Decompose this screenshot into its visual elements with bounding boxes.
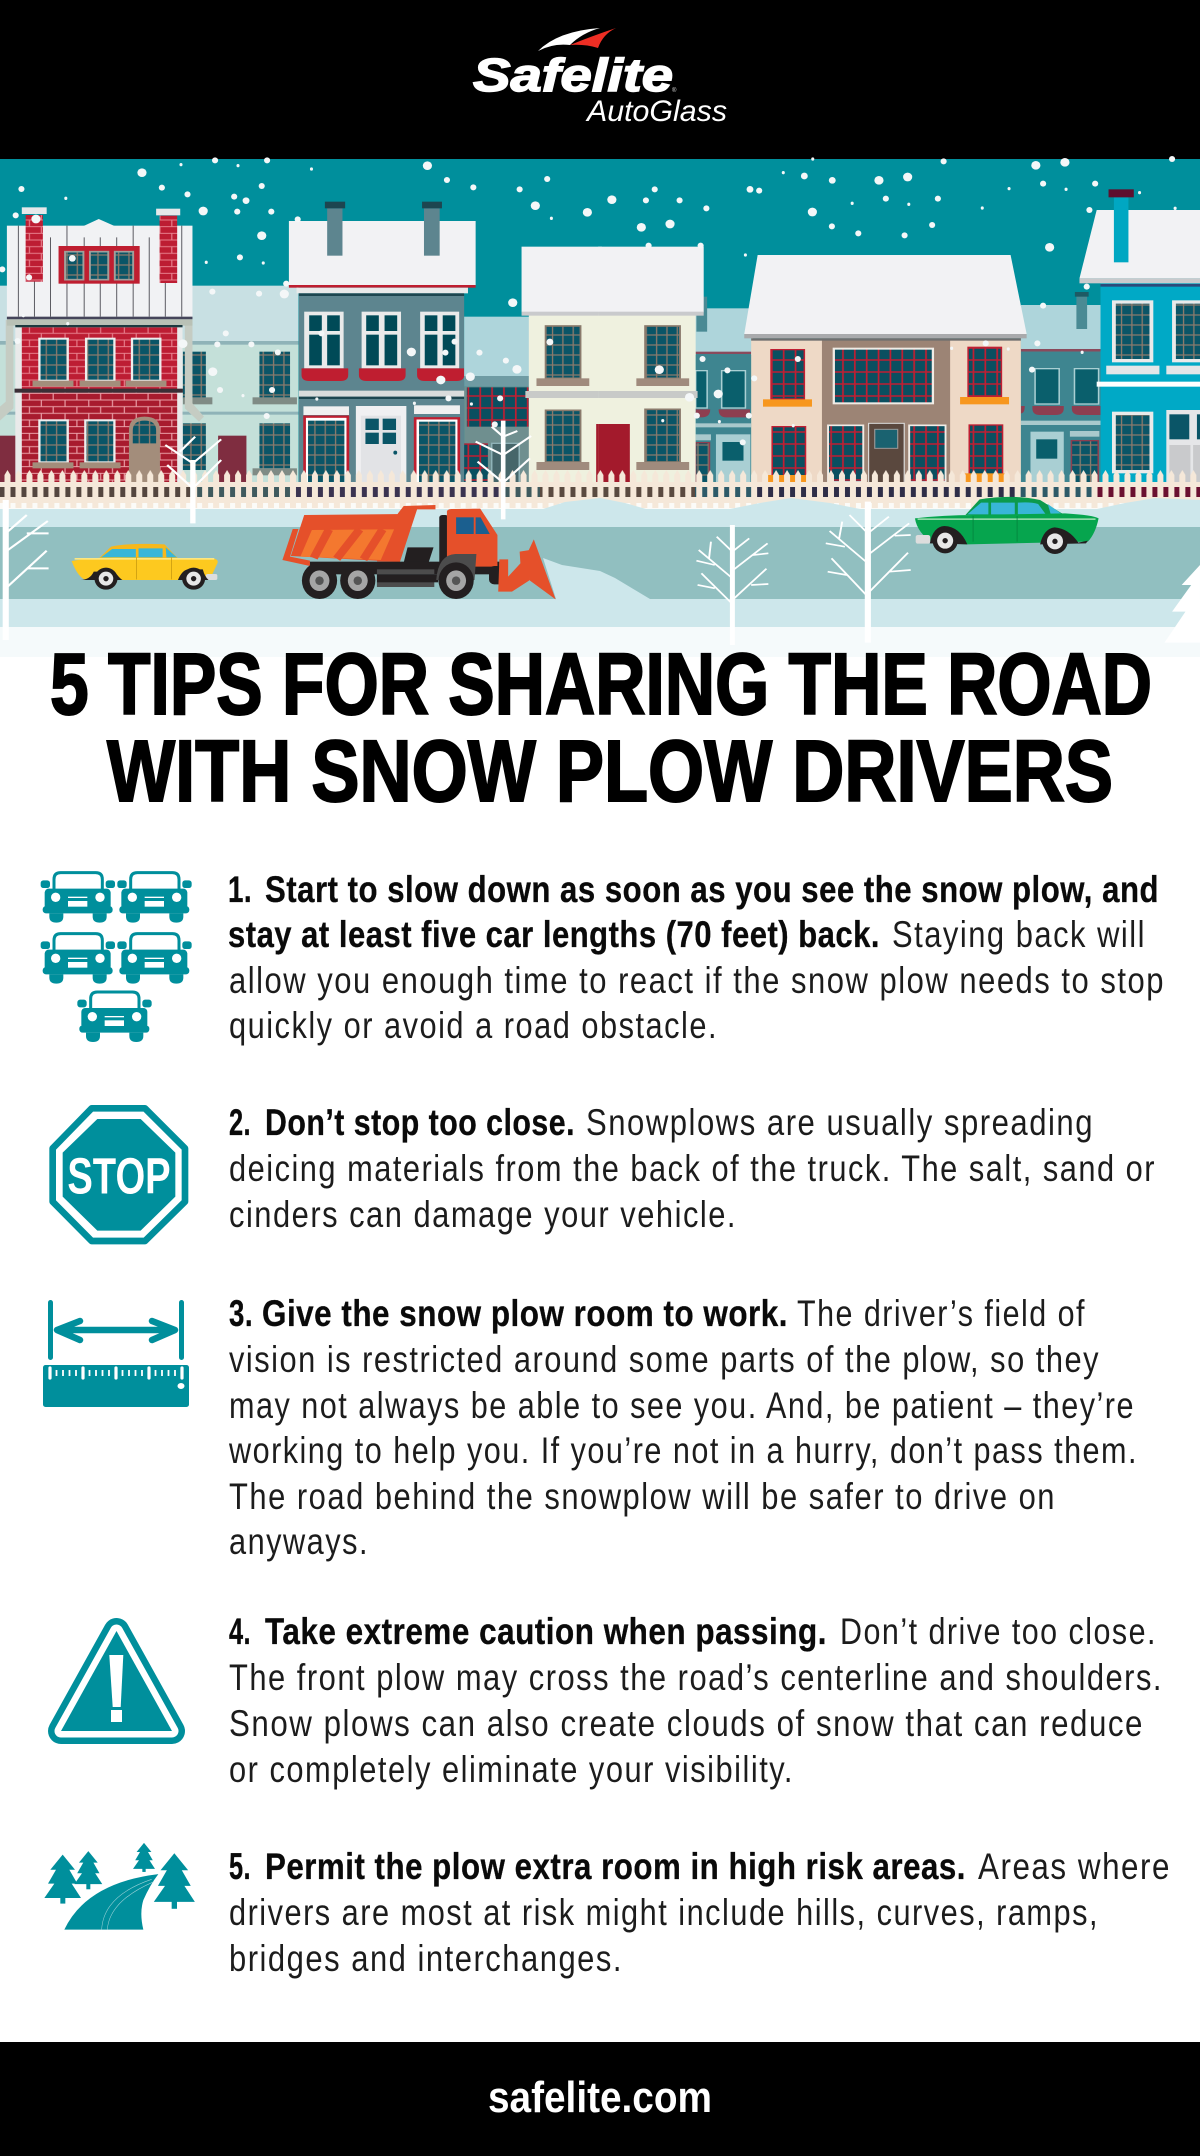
tip 2 text: Don’t stop too close.	[265, 1102, 575, 1143]
icon: stop sign: STOP	[67, 1147, 171, 1204]
sky	[0, 159, 1200, 509]
snow plow truck	[282, 505, 556, 599]
falling snow, right	[607, 156, 1177, 445]
tip 2 text: Snowplows are usually spreading	[586, 1102, 1094, 1143]
tip 5 text: Permit the plow extra room in high risk areas.	[265, 1846, 966, 1887]
tip 1 text: quickly or avoid a road obstacle.	[229, 1005, 718, 1046]
back row buildings, left	[0, 286, 298, 486]
tip 3 text: 3.	[229, 1293, 253, 1334]
icon: warning triangle	[61, 1631, 172, 1731]
tip 4 text: Take extreme caution when passing.	[265, 1611, 827, 1652]
tip 5 text: 5.	[229, 1846, 251, 1887]
tree near plow	[696, 525, 768, 645]
icon: stop sign	[53, 1108, 185, 1241]
tip 1 text: stay at least five car lengths (70 feet) back.	[228, 914, 880, 955]
logo: Safelite AutoGlass: Safelite	[473, 49, 673, 101]
yellow car	[72, 544, 218, 590]
tip 3 text: The driver’s field of	[797, 1293, 1086, 1334]
tip 3 text: anyways.	[229, 1521, 369, 1562]
tip 5 text: Areas where	[978, 1846, 1171, 1887]
snow ground	[0, 498, 1200, 657]
brick house	[0, 207, 204, 484]
vehicles and left trees	[6, 421, 556, 640]
tip 1 text: Staying back will	[892, 914, 1146, 955]
tree right of grey house	[476, 421, 531, 519]
tip 2 text	[229, 1102, 1156, 1235]
falling snow, left	[0, 157, 592, 427]
right houses layer	[598, 189, 1200, 484]
left houses layer	[0, 202, 602, 486]
white strip below road	[0, 627, 1200, 657]
illustration: snowy street scene	[0, 156, 1200, 657]
tip 3 text: The road behind the snowplow will be safer to drive on	[229, 1476, 1056, 1517]
footer bar: safelite.com	[488, 2073, 712, 2122]
middle back building	[464, 317, 529, 484]
blue house	[1079, 189, 1200, 484]
green car	[915, 497, 1099, 554]
header bar	[0, 0, 1200, 159]
tip 1 text: 1.	[228, 869, 252, 910]
pine tree right edge	[1164, 565, 1200, 643]
icon: trees and winding road	[44, 1843, 195, 1930]
icon: measure arrow and ruler	[43, 1300, 189, 1407]
tip 4 text: 4.	[229, 1611, 251, 1652]
tip 4 text	[229, 1611, 1163, 1790]
cream house left part	[522, 247, 602, 484]
footer bar	[0, 2042, 1200, 2156]
tip 2 text: 2.	[229, 1102, 251, 1143]
tip 5 text	[229, 1846, 1171, 1979]
cream house right part	[598, 247, 704, 484]
tree center right	[826, 502, 911, 643]
large tree far left	[6, 500, 49, 640]
title	[50, 636, 1152, 820]
tip 4 text: or completely eliminate your visibility.	[229, 1749, 794, 1790]
tip 1 text	[228, 869, 1165, 1046]
tree left fence	[165, 437, 221, 523]
road	[0, 527, 1200, 599]
green car and right trees	[696, 497, 1200, 645]
tip 5 text: bridges and interchanges.	[229, 1938, 623, 1979]
tan house	[744, 255, 1027, 484]
grey house	[289, 202, 476, 484]
logo: Safelite AutoGlass: AutoGlass	[585, 95, 727, 128]
tip 3 text: Give the snow plow room to work.	[262, 1293, 788, 1334]
logo: Safelite AutoGlass	[473, 28, 727, 128]
icon: five cars	[41, 873, 192, 1042]
back row buildings, right	[692, 292, 1101, 484]
tip 3 text	[228, 1293, 1138, 1562]
logo: Safelite AutoGlass: ®	[672, 87, 677, 94]
picket fence	[0, 470, 1200, 509]
tip 2 text: cinders can damage your vehicle.	[229, 1194, 737, 1235]
